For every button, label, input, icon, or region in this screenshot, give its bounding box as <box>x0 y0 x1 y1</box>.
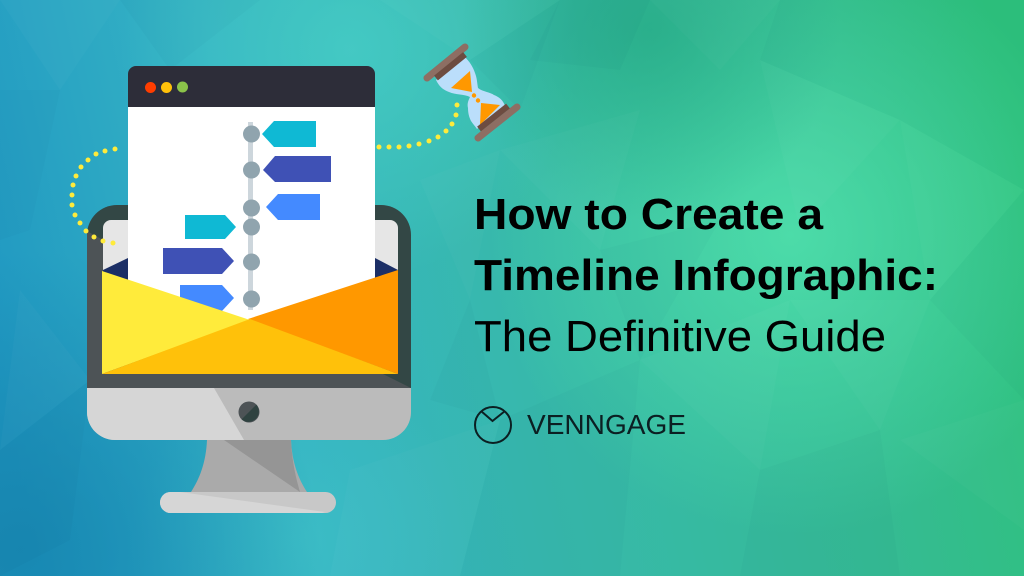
browser window <box>128 66 375 330</box>
icon: hourglass <box>427 47 517 138</box>
timeline axis <box>248 122 253 310</box>
timeline tags <box>163 121 331 311</box>
title <box>474 190 938 300</box>
brand logo <box>475 407 686 443</box>
title: Timeline Infographic: <box>474 251 938 300</box>
monitor <box>87 205 411 513</box>
webcam <box>238 402 260 422</box>
dotted path: left <box>70 146 118 246</box>
monitor screen <box>103 220 398 374</box>
monitor base <box>160 492 336 513</box>
dotted path: right <box>376 102 460 150</box>
browser page <box>128 90 375 330</box>
subtitle: The Definitive Guide <box>474 312 886 361</box>
browser title bar <box>128 66 375 107</box>
window buttons <box>145 82 188 93</box>
monitor bezel <box>87 205 411 388</box>
wordmark: VENNGAGE <box>527 409 686 440</box>
monitor stand <box>191 440 307 492</box>
icon: venngage mark <box>475 407 511 443</box>
timeline nodes <box>243 126 260 308</box>
monitor chin <box>87 388 411 440</box>
title: How to Create a <box>474 190 824 239</box>
envelope back <box>103 258 398 374</box>
envelope front <box>102 270 398 374</box>
